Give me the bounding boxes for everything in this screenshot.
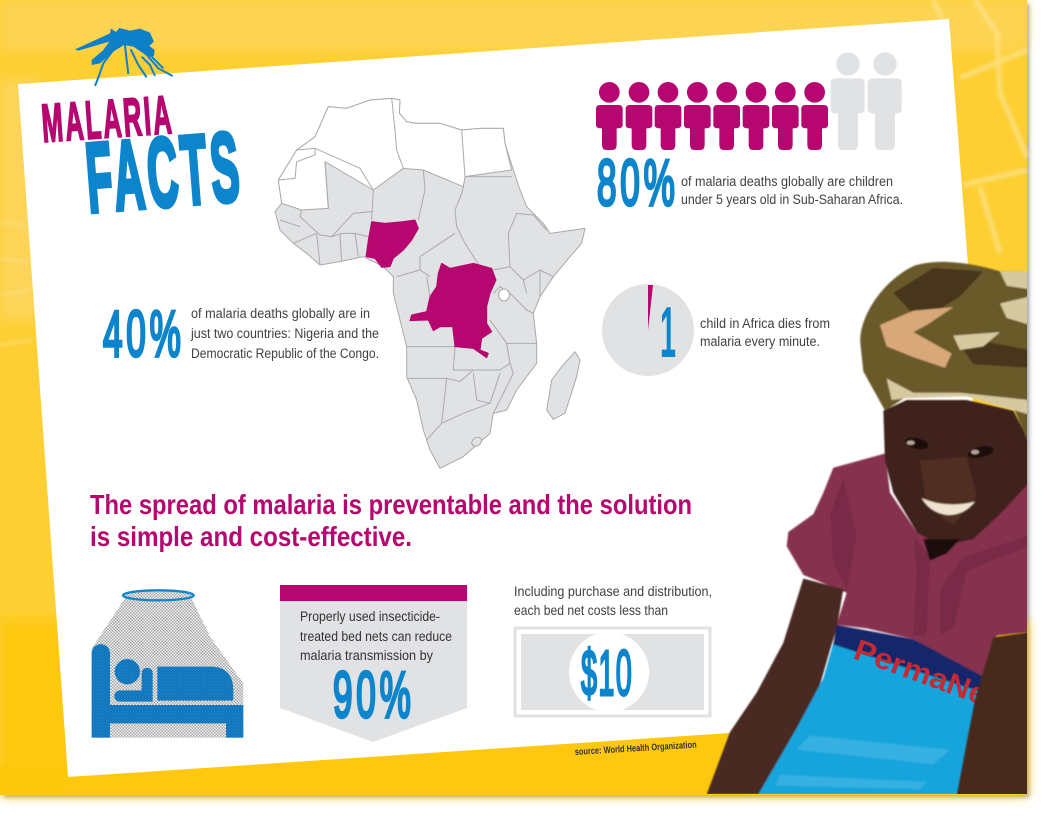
text: 80 percent description: [681, 174, 903, 207]
text: 80 percent description: under 5 years old in Sub-Saharan Africa.: [681, 192, 903, 207]
text: bed net cost: each bed net costs less than: [514, 602, 668, 618]
photo: left arm: [707, 578, 843, 794]
text: source credit: source: World Health Organization: [575, 740, 697, 758]
photo: smile: [922, 498, 975, 515]
text: bed net cost: [514, 583, 712, 618]
icon: bed and sleeper: [92, 644, 243, 738]
photo: shirt: [786, 452, 1027, 677]
panel body: [280, 601, 467, 742]
text: 80 percent description: of malaria deaths globally are children: [681, 174, 893, 189]
text: 40 percent description: just two countries: Nigeria and the: [190, 326, 379, 341]
title: Malaria Facts: [40, 84, 247, 233]
chart: one minute pie: 1: [660, 293, 676, 373]
pictogram: two grey figures: [831, 52, 902, 150]
text: bed net description: [300, 608, 452, 663]
map: country borders: [278, 98, 553, 440]
panel header bar: [280, 585, 467, 601]
text: bed net description: Properly used insecticide-: [300, 608, 440, 624]
photo: eyes: [904, 438, 928, 450]
chart: one minute pie: [602, 284, 694, 376]
photo: headwrap: [860, 262, 1030, 446]
number: $10: $10: [581, 637, 633, 709]
icon: net canopy: [92, 598, 243, 738]
text: 40 percent description: of malaria deaths globally are in: [191, 306, 370, 321]
icon: person sleeping under bed net: [92, 590, 243, 738]
photo: package brand text: PermaNet: [850, 634, 1002, 716]
text: bed net cost: Including purchase and distribution,: [514, 583, 712, 599]
map: Lake Victoria: [499, 289, 509, 301]
title word: Malaria: MALARIA: [40, 84, 175, 153]
photo: right arm: [957, 632, 1030, 796]
pictogram: eight highlighted figures: [596, 82, 828, 150]
panel: bed net effectiveness: [280, 585, 467, 742]
map: unshaded northern countries: [278, 98, 512, 210]
map: Nigeria highlighted: [366, 220, 418, 267]
text: bed net description: treated bed nets can reduce: [300, 628, 452, 644]
number: 90%: 90%: [333, 660, 415, 732]
heading: prevention message: [90, 489, 692, 552]
map: Africa: [275, 98, 585, 468]
icon: net hoop: [123, 590, 194, 600]
text: child dies every minute: child in Africa dies from: [700, 316, 830, 331]
map: continent in grey: [275, 98, 585, 468]
icon: ten dollar bill: [515, 628, 710, 716]
text: 40 percent description: Democratic Republic of the Congo.: [191, 346, 379, 361]
photo: face: [883, 400, 1030, 546]
heading: prevention message: The spread of malaria is preventable and the solution: [90, 489, 692, 520]
pictogram: ten children, eight highlighted: [596, 52, 902, 150]
photo: net package: [758, 643, 987, 794]
stat: 80 percent: [597, 148, 903, 220]
photo: child upper body: [707, 262, 1030, 794]
title word: Facts: FACTS: [82, 112, 247, 233]
photo: smiling child holding bed net package: [707, 262, 1030, 796]
text: child dies every minute: malaria every minute.: [700, 334, 820, 349]
map: Democratic Republic of the Congo highlighted: [410, 263, 496, 358]
heading: prevention message: is simple and cost-effective.: [90, 521, 412, 552]
map: Madagascar: [547, 352, 580, 419]
stat: 40 percent: [103, 299, 379, 371]
number: 80%: 80%: [597, 148, 679, 220]
text: 40 percent description: [190, 306, 379, 361]
text: bed net description: malaria transmission by: [300, 647, 433, 663]
number: 40%: 40%: [103, 299, 185, 371]
icon: mosquito: [75, 28, 173, 86]
text: child dies every minute: [700, 316, 830, 349]
map: Lesotho: [470, 435, 483, 448]
